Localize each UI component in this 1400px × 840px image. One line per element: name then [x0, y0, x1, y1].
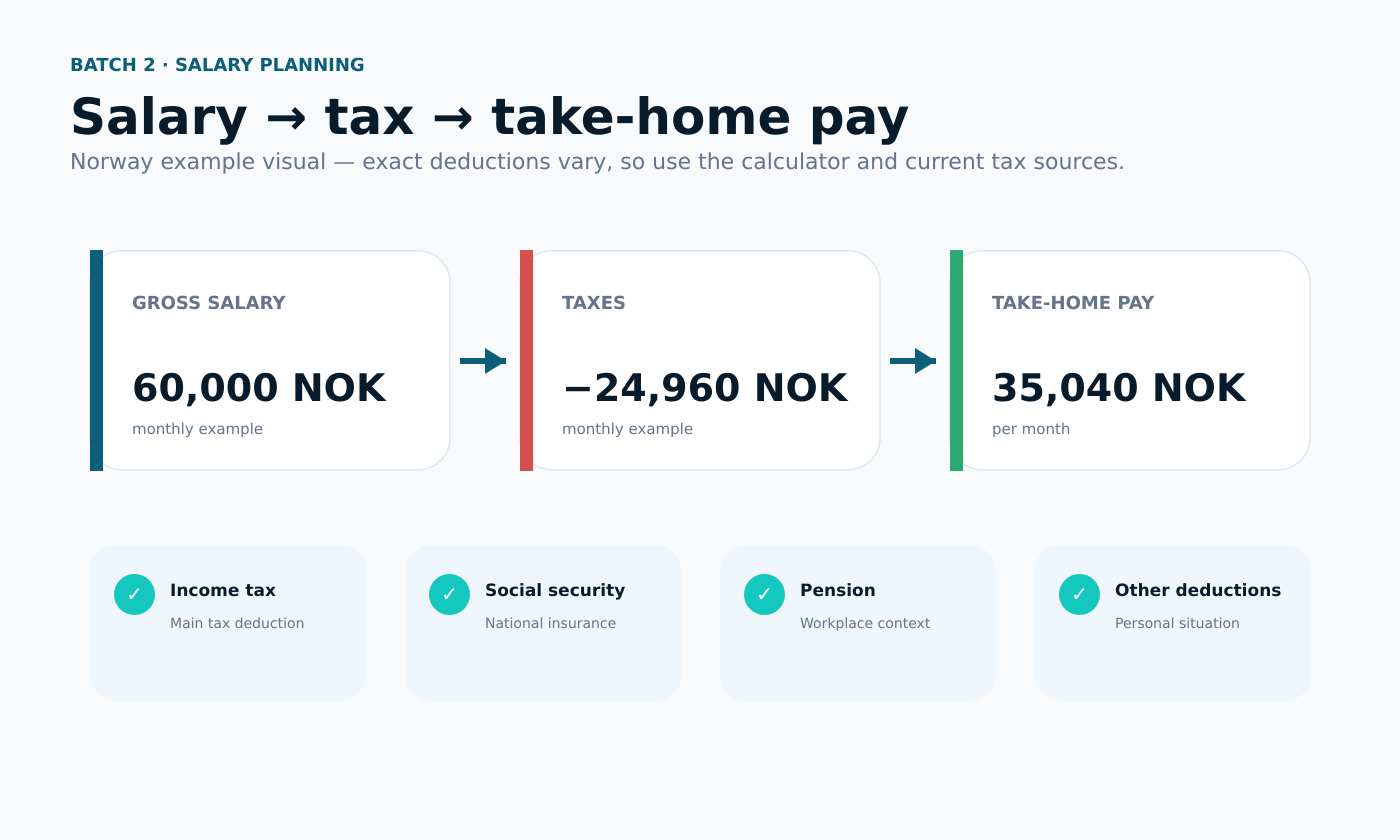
- arrow: gross to taxes: [460, 348, 506, 374]
- panel: social security: [405, 545, 682, 701]
- panel: taxes: −24,960 NOK: [562, 366, 849, 410]
- panel: take-home pay: 35,040 NOK: [992, 366, 1247, 410]
- panel: other deductions: ✓: [1071, 582, 1088, 606]
- panel: other deductions: Personal situation: [1115, 616, 1240, 632]
- panel: taxes: TAXES: [562, 293, 626, 314]
- panel: gross salary: 60,000 NOK: [132, 366, 387, 410]
- panel: pension: ✓: [756, 582, 773, 606]
- panel: gross salary: [90, 250, 450, 471]
- panel: other deductions: [1035, 545, 1311, 701]
- panel: gross salary: GROSS SALARY: [132, 293, 286, 314]
- panel: pension: [720, 545, 996, 701]
- panel: social security: Social security: [485, 581, 625, 601]
- panel: social security: ✓: [441, 582, 458, 606]
- title: Salary → tax → take-home pay: [70, 88, 909, 146]
- panel: income tax: ✓: [126, 582, 143, 606]
- panel: income tax: [90, 545, 366, 701]
- panel: taxes: monthly example: [562, 420, 693, 438]
- arrow: taxes to take-home: [890, 348, 936, 374]
- panel: income tax: Main tax deduction: [170, 616, 304, 632]
- panel: take-home pay: [950, 250, 1310, 471]
- eyebrow: BATCH 2 · SALARY PLANNING: [70, 55, 365, 76]
- panel: social security: National insurance: [485, 616, 616, 632]
- panel: other deductions: Other deductions: [1115, 581, 1281, 601]
- panel: taxes: [520, 250, 880, 471]
- panel: income tax: Income tax: [170, 581, 276, 601]
- panel: gross salary: monthly example: [132, 420, 263, 438]
- subtitle: Norway example visual — exact deductions vary, so use the calculator and current tax sources.: [70, 150, 1125, 175]
- panel: pension: Workplace context: [800, 616, 931, 632]
- panel: take-home pay: per month: [992, 420, 1070, 438]
- panel: pension: Pension: [800, 581, 876, 601]
- panel: take-home pay: TAKE-HOME PAY: [992, 293, 1155, 314]
